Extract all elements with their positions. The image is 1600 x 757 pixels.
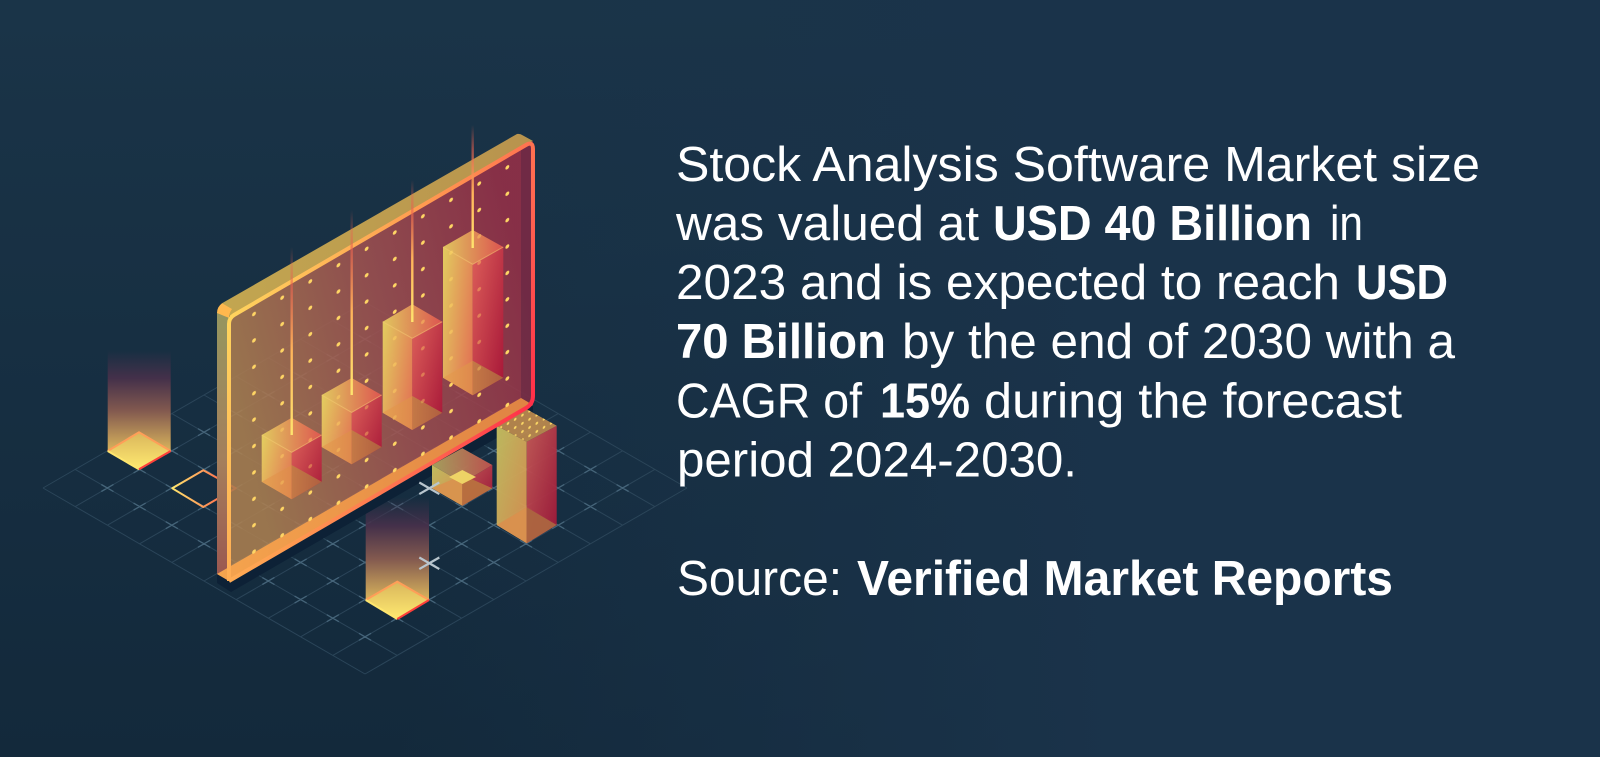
panel bottom ledge (217, 398, 533, 581)
dot lattice (240, 146, 521, 573)
panel left side (217, 312, 229, 581)
line 6: period 2024-2030. (677, 434, 1077, 488)
light beams above bars (290, 125, 474, 435)
line 2: in (1330, 197, 1363, 251)
line 1: Stock Analysis Software Market size (676, 138, 1480, 192)
empty outlined tile (172, 470, 236, 507)
bar 3 (383, 304, 442, 430)
line 2 (675, 197, 1363, 251)
display panel (217, 134, 533, 581)
line 2: was valued at (675, 197, 979, 251)
line 3: USD (1356, 256, 1448, 310)
line 3: 2023 and is expected to reach (676, 256, 1340, 310)
line 5: 15% (880, 374, 970, 428)
line 5: during the forecast (984, 374, 1402, 428)
small floor box (432, 448, 492, 506)
market summary text (675, 138, 1480, 488)
dots showing through bars (240, 146, 521, 573)
line 4: by the end of 2030 with a (902, 315, 1456, 369)
bar 1 (262, 418, 322, 499)
floor cross markers (419, 482, 439, 569)
source line: Verified Market Reports (857, 552, 1393, 606)
panel glowing border (229, 144, 533, 581)
panel front glass (229, 141, 533, 581)
panel corner (217, 303, 232, 318)
panel shadow (217, 396, 533, 592)
left glowing column (108, 350, 171, 469)
panel top face (222, 134, 533, 317)
lower glowing column (366, 497, 429, 619)
bar 4 (443, 230, 503, 395)
line 2: USD 40 Billion (993, 197, 1312, 251)
isometric illustration (43, 125, 687, 674)
line 5: CAGR of (676, 374, 862, 428)
source line: Source: (677, 552, 842, 606)
floor grid (43, 302, 687, 674)
tall floor box with dotted top (497, 409, 557, 543)
line 5 (676, 374, 1402, 428)
candlestick bars (262, 230, 503, 499)
panel right inner strip (521, 141, 533, 412)
line 4: 70 Billion (676, 315, 886, 369)
bar 2 (322, 378, 382, 464)
